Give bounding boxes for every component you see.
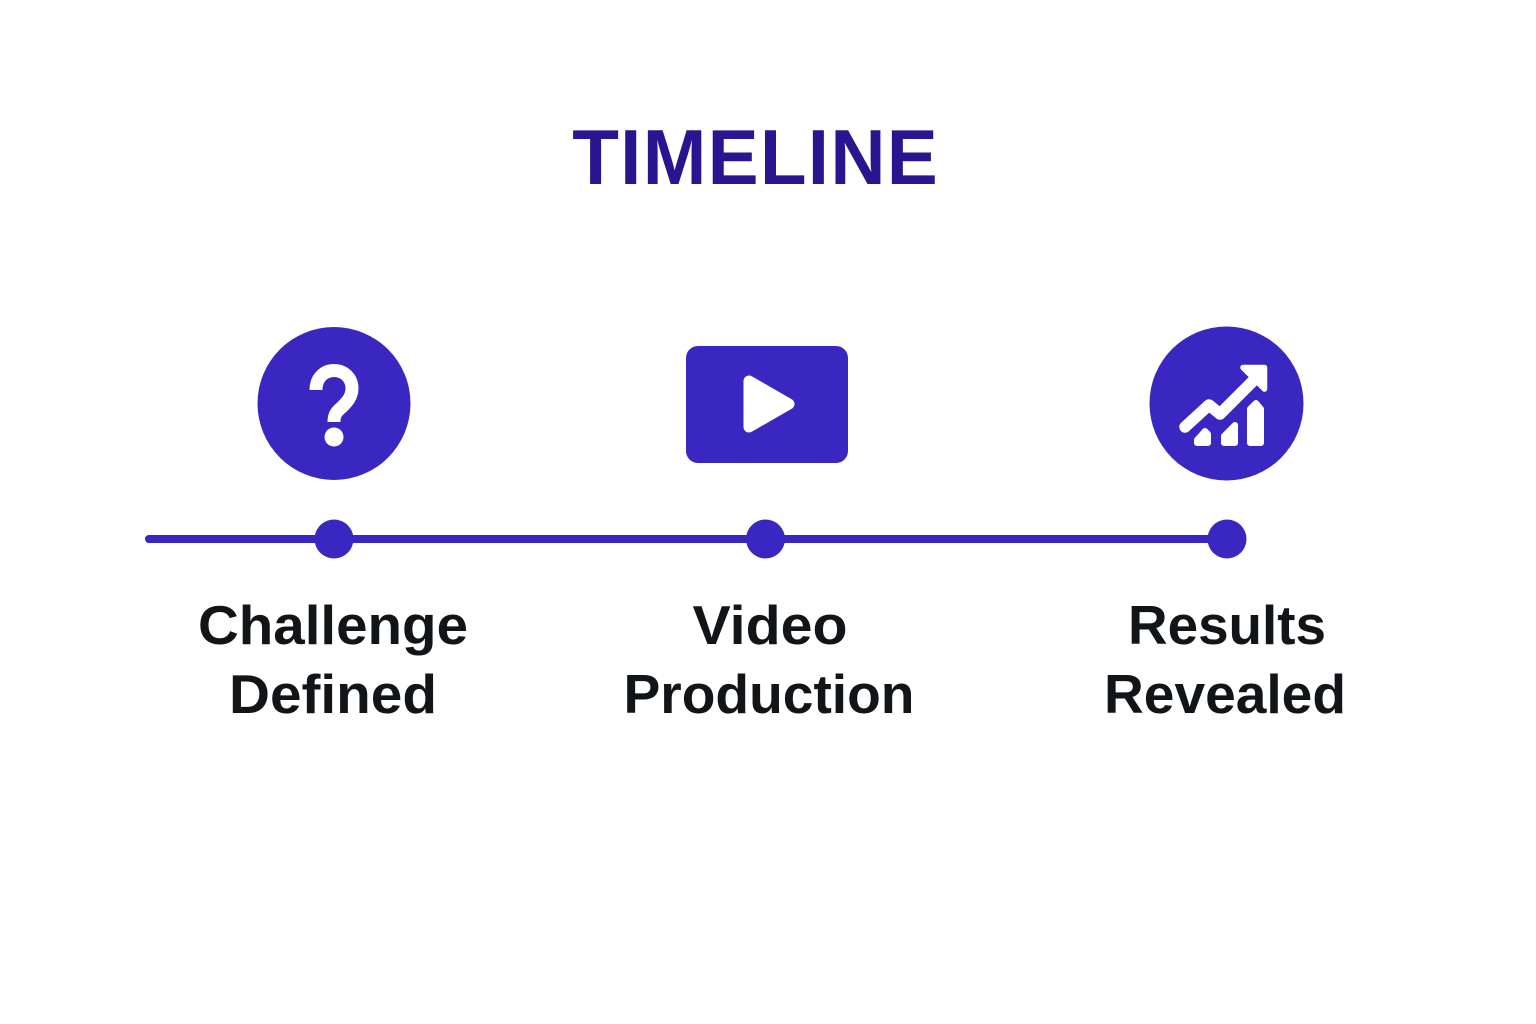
label: video production: Video (692, 594, 848, 656)
marker: video (746, 520, 785, 558)
label: challenge defined (198, 594, 468, 725)
label: challenge defined: Defined (229, 663, 437, 725)
label: results revealed: Revealed (1104, 663, 1346, 725)
label: results revealed (1104, 594, 1346, 725)
marker: results (1208, 520, 1246, 558)
timeline axis (149, 520, 1246, 558)
icon: rising chart (1150, 326, 1304, 480)
icon: question mark (258, 327, 410, 480)
label: video production (624, 594, 914, 725)
label: video production: Production (624, 663, 914, 725)
title: TIMELINE (572, 114, 938, 201)
label: challenge defined: Challenge (198, 594, 468, 656)
label: results revealed: Results (1128, 594, 1326, 656)
marker: challenge (314, 520, 354, 558)
icon: video play (686, 346, 848, 463)
